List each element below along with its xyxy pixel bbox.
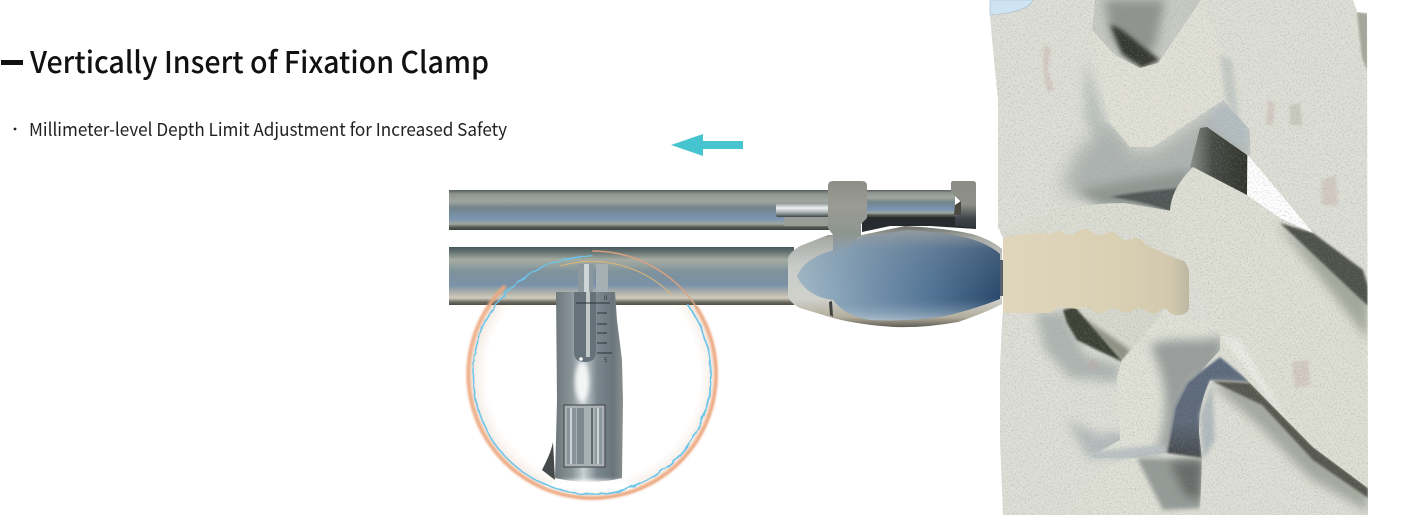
sleeve highlight	[575, 362, 589, 402]
scale number 0: 0	[604, 293, 608, 302]
mottled shade left of slot	[1035, 312, 1120, 382]
lower diagonal edge shade	[1067, 420, 1165, 458]
instrument: lower shaft	[449, 247, 794, 305]
rear rod section	[860, 190, 955, 217]
instrument: upper guide rod	[449, 190, 849, 230]
bone: base shape	[990, 0, 1368, 515]
sleeve base fade	[542, 480, 638, 492]
instrument: slider clamp and handle	[776, 181, 1003, 327]
upper disc surface	[1000, 203, 1170, 238]
white gap between bones	[1247, 155, 1313, 233]
title: Vertically Insert of Fixation Clamp	[29, 38, 489, 82]
soft shade left of ridge	[1082, 70, 1117, 138]
handle tip	[1000, 260, 1003, 296]
slot shadow	[1063, 307, 1123, 362]
zoomed sleeve	[555, 292, 623, 482]
bullet dot	[14, 128, 16, 130]
shade under V ridge	[1060, 100, 1250, 215]
left edge shade on lower right piece	[1200, 385, 1215, 460]
bone: shading and ridges	[985, 0, 1375, 515]
stop notch	[954, 201, 961, 215]
large lamina piece	[1170, 167, 1368, 488]
lower right dark strip	[1212, 381, 1368, 498]
light area right of slot	[1080, 308, 1165, 362]
orange ring	[468, 251, 716, 498]
subtitle text: Millimeter-level Depth Limit Adjustment for Increased Safety	[29, 116, 508, 142]
vertebra illustration	[985, 0, 1375, 515]
depth scale ticks	[576, 303, 612, 353]
dark slot	[862, 217, 976, 232]
cage implant	[1003, 229, 1189, 315]
slot olive fade	[1080, 315, 1130, 362]
bottom piece deep shadow	[1170, 460, 1202, 500]
stone grain texture	[985, 0, 1375, 515]
dark band above disc	[1110, 188, 1180, 212]
pin	[776, 203, 829, 226]
upper recess	[1092, 0, 1201, 68]
knurled grip window	[564, 405, 605, 467]
rear stop block	[951, 181, 976, 228]
arrow: direction of movement	[671, 134, 743, 156]
soft ridge right shade	[1220, 56, 1239, 118]
dark gap wedge	[1190, 127, 1247, 195]
zoomed sleeve fin	[542, 442, 555, 480]
slider clamp	[828, 181, 867, 251]
soft shade on lower right piece	[1212, 384, 1368, 512]
handle blue facet	[797, 230, 1000, 320]
blue tissue at top left	[990, 0, 1033, 15]
scale number 5: 5	[604, 355, 607, 364]
pink blemishes	[1043, 45, 1338, 388]
heading dash	[1, 60, 23, 65]
lower seam	[829, 301, 833, 317]
ridge surface light	[1110, 120, 1126, 138]
bottom piece	[1124, 458, 1138, 461]
magnifier inset	[468, 251, 717, 499]
sleeve slot	[574, 292, 596, 362]
rounded process	[1092, 332, 1220, 458]
slot glint	[579, 357, 583, 361]
lens white area	[469, 305, 717, 499]
top right edge shade	[1357, 12, 1368, 72]
dark strip on lamina edge	[1280, 223, 1368, 306]
blue ring	[473, 256, 711, 494]
handle blue sheen	[797, 230, 1000, 320]
blue-grey recess	[1167, 357, 1250, 458]
bottom piece shadow	[1137, 458, 1202, 510]
slot highlight	[586, 292, 590, 357]
lamina shading	[1224, 225, 1368, 404]
zoomed inner prongs	[578, 264, 608, 294]
lower right piece	[1199, 381, 1214, 509]
handle body	[788, 226, 1002, 327]
